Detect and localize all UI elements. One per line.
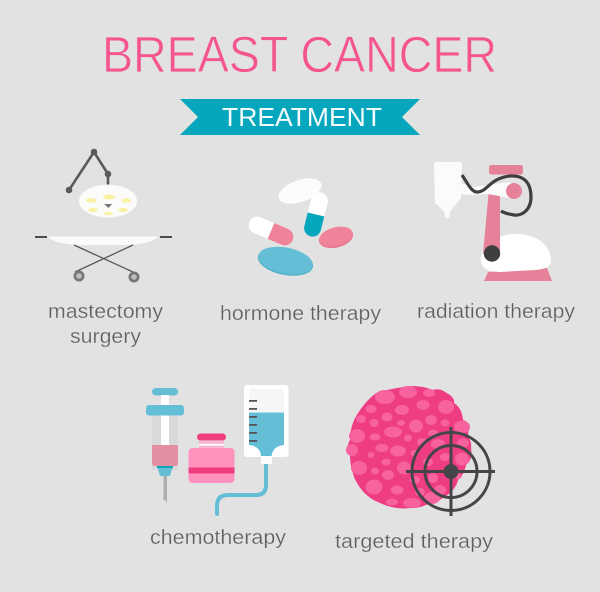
scale ticks (249, 400, 257, 442)
reticle (406, 427, 495, 516)
white tablet (275, 173, 325, 209)
white bottle (434, 162, 462, 218)
machine body (481, 234, 551, 272)
column (483, 194, 500, 254)
icon: surgery lamp and table (35, 150, 172, 282)
title: BREAST CANCER (102, 26, 497, 83)
pink tablet (317, 223, 355, 251)
machine base (484, 268, 552, 281)
icon: syringe (146, 388, 184, 503)
lamp arm (67, 150, 110, 192)
plunger cap (152, 388, 178, 396)
fluid (249, 412, 284, 456)
pink liquid (152, 445, 178, 466)
ribbon banner: treatment (180, 99, 420, 135)
pink head (506, 183, 522, 199)
needle hub (157, 466, 173, 476)
label: mastectomy surgery: mastectomy (48, 301, 163, 323)
icon: radiation machine (434, 162, 552, 281)
flange (146, 405, 184, 416)
barrel (152, 412, 178, 470)
bag (244, 385, 288, 457)
table legs and wheels (74, 245, 140, 282)
icon: pills (246, 173, 355, 280)
label: hormone therapy: hormone therapy (220, 303, 381, 325)
white and pink capsule (246, 214, 296, 248)
blue tablet (255, 242, 316, 280)
tumor (346, 386, 471, 508)
icon: medicine jar (188, 434, 234, 483)
cable (462, 175, 531, 215)
white arm (460, 182, 516, 199)
lamp head (79, 184, 137, 218)
label: mastectomy surgery: surgery (70, 326, 141, 348)
label: chemotherapy: chemotherapy (150, 527, 286, 549)
icon: IV drip bag (217, 385, 288, 514)
label: radiation therapy: radiation therapy (417, 301, 575, 323)
table (35, 236, 172, 245)
plunger rod (161, 395, 169, 445)
ribbon banner: treatment: TREATMENT (222, 102, 382, 132)
needle (164, 476, 167, 503)
label: mastectomy surgery (48, 301, 163, 348)
label: targeted therapy: targeted therapy (335, 531, 493, 553)
icon: targeted tumor and reticle (346, 386, 495, 516)
tube (217, 464, 266, 514)
white and teal capsule (302, 191, 330, 238)
neck (261, 456, 272, 464)
pivot (484, 245, 500, 262)
top bar (489, 165, 523, 174)
